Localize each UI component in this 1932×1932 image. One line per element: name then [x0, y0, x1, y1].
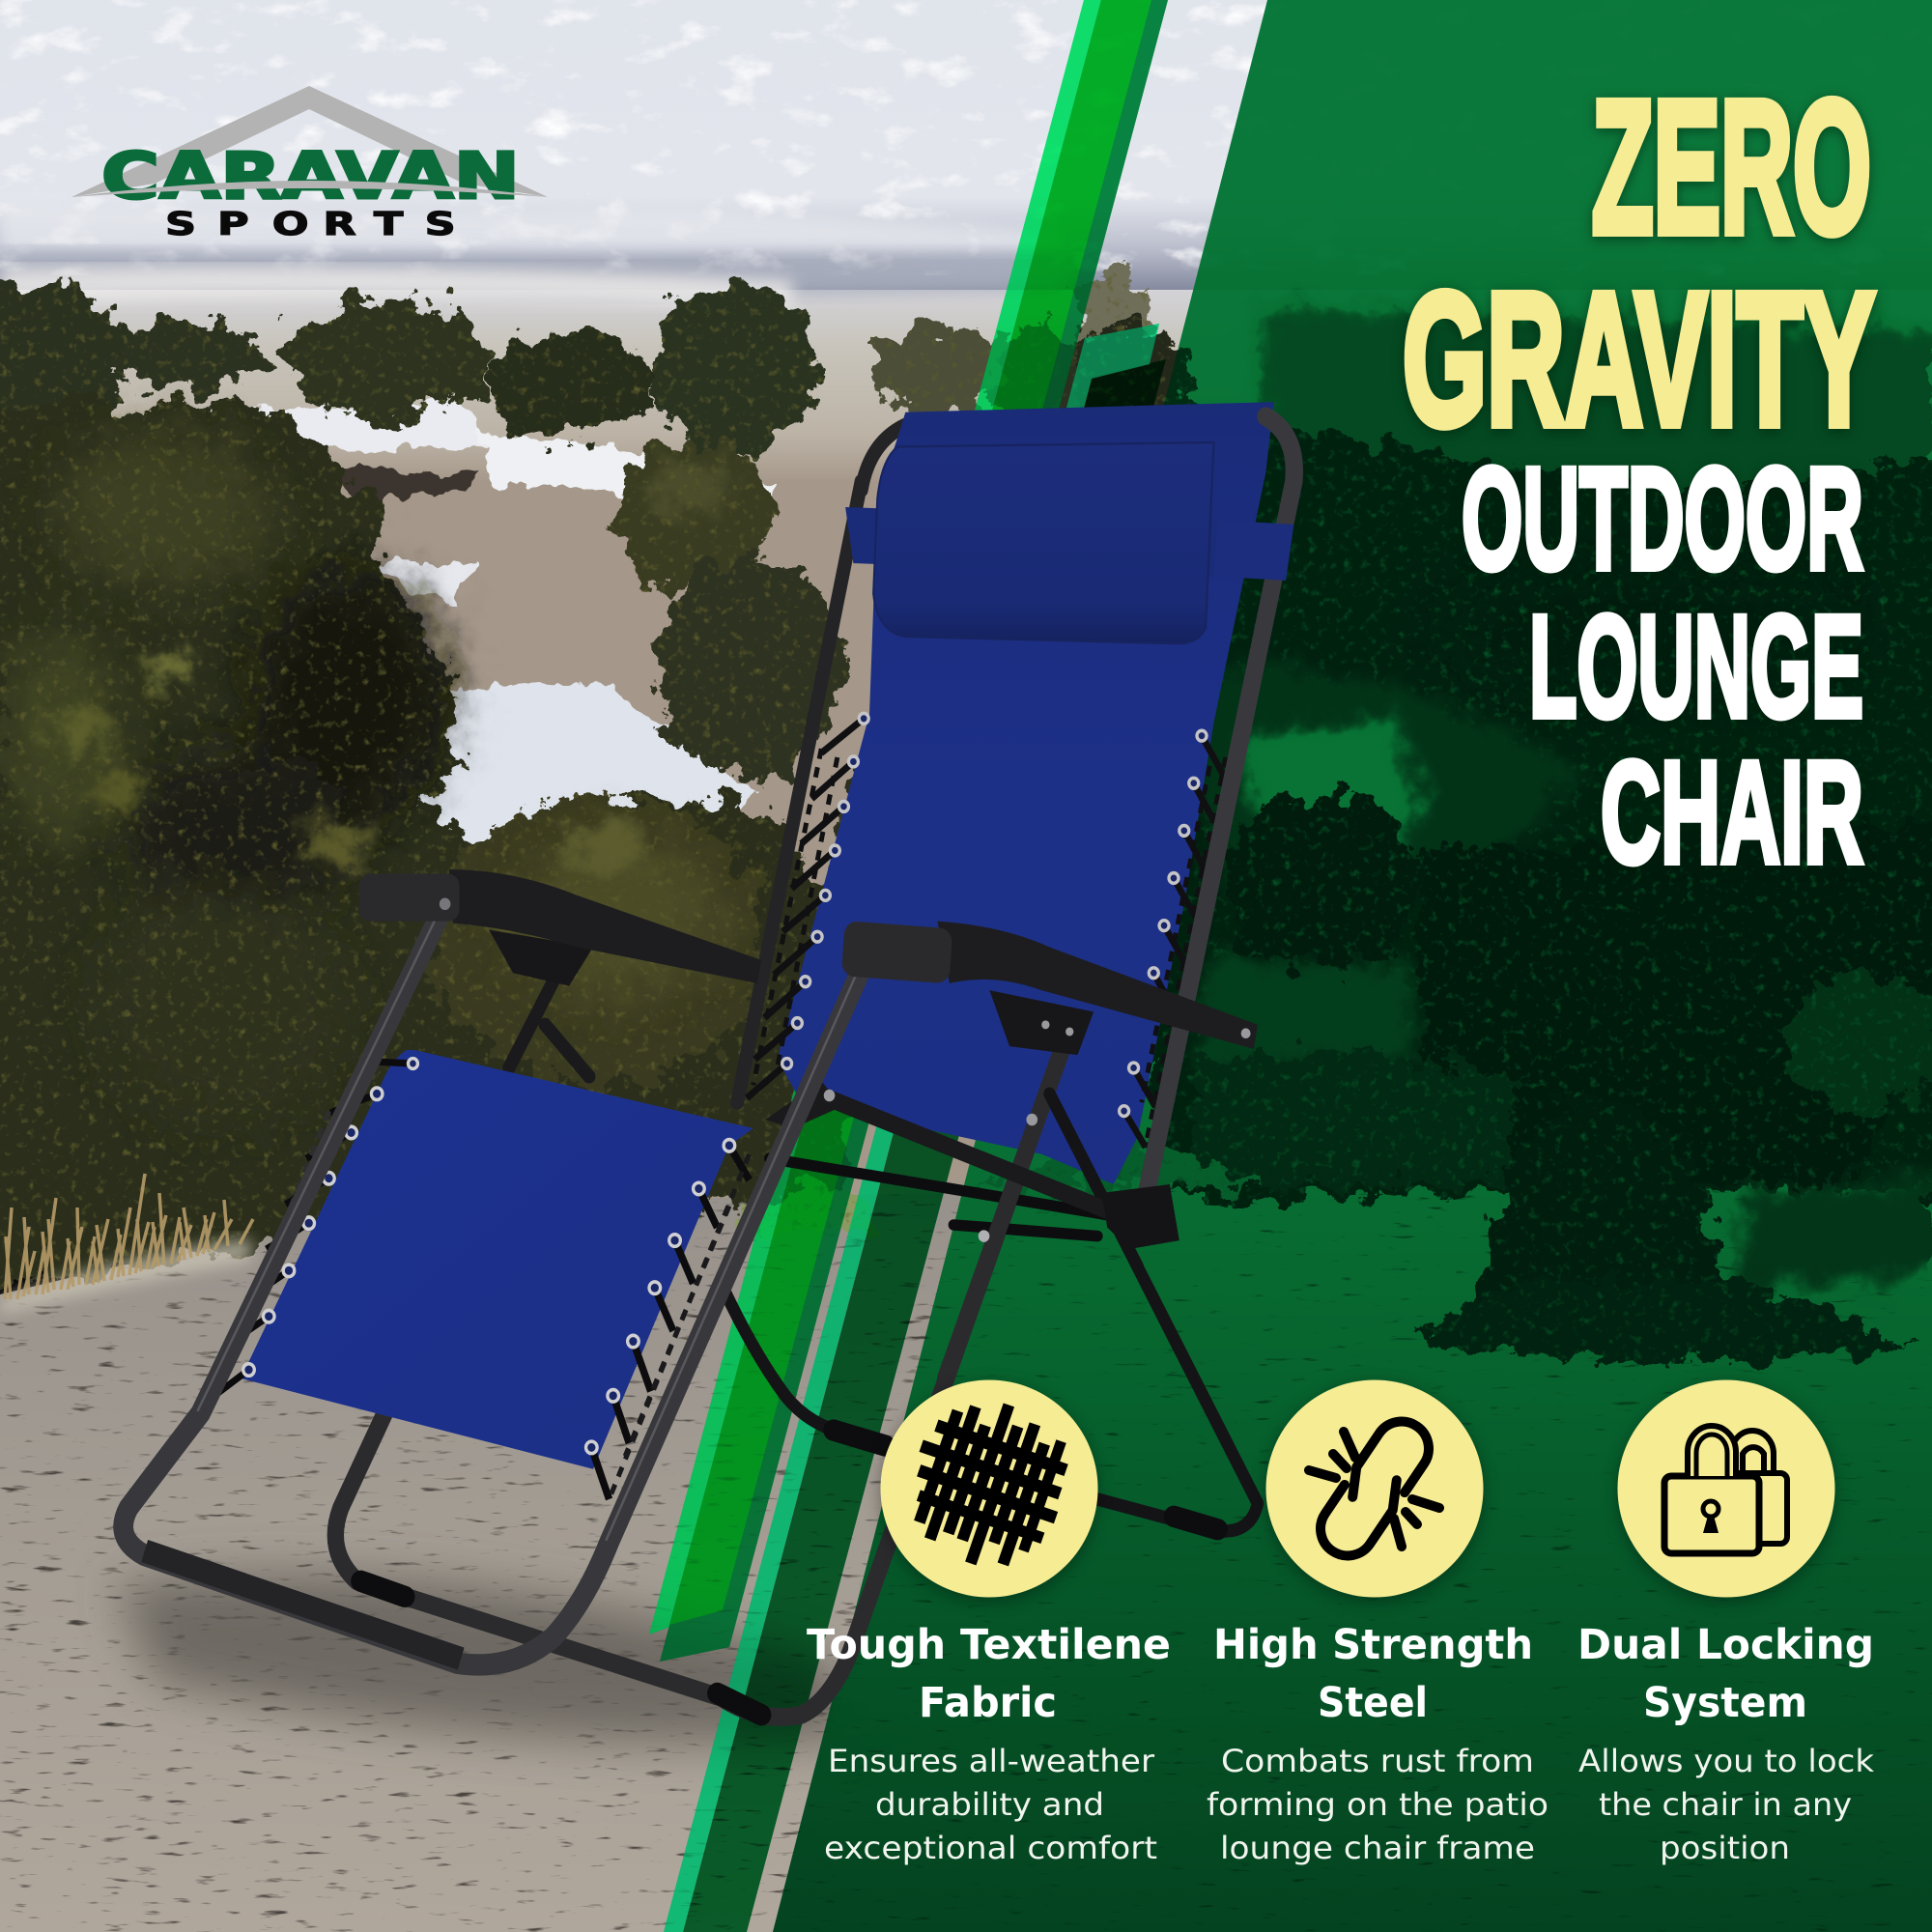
description: Allows you to lock [1578, 1743, 1874, 1779]
logo roof [71, 86, 548, 197]
icon: broken chain link [1265, 1379, 1484, 1598]
title: Zero Gravity Outdoor Lounge Chair [1403, 62, 1875, 893]
diagonal stripes: first green band [649, 0, 1168, 1662]
logo swoosh [71, 181, 548, 197]
feature: dual locking system [1577, 1379, 1874, 1866]
logo wordmark: CARAVAN [101, 139, 520, 213]
feature: high strength steel: forming on the patio [1207, 1786, 1548, 1823]
feature: tough textilene fabric: exceptional comfort [824, 1830, 1157, 1866]
logo: Caravan Sports [71, 86, 548, 242]
description: Combats rust from [1221, 1743, 1534, 1779]
feature: tough textilene fabric: durability and [875, 1786, 1104, 1823]
right back frame tube [1146, 416, 1294, 1197]
feature: tough textilene fabric [807, 1379, 1171, 1866]
icon: two padlocks [1617, 1379, 1835, 1598]
feature: high strength steel: lounge chair frame [1220, 1830, 1535, 1866]
under seat bars and joint [765, 1081, 1179, 1249]
feature: dual locking system: position [1660, 1830, 1790, 1866]
pillow [873, 442, 1213, 643]
feature: tough textilene fabric: Fabric [919, 1679, 1057, 1727]
rear leg frame [335, 425, 1258, 1717]
diagonal stripes: second green band [664, 324, 1166, 1932]
feature: dual locking system: System [1643, 1679, 1807, 1727]
panel: green duotone landscape [773, 0, 1932, 1932]
feature: high strength steel: Steel [1318, 1679, 1428, 1727]
upper leg tubes in front of the back fabric [946, 1051, 1138, 1378]
logo tagline: SPORTS [165, 207, 456, 242]
left armrest [359, 869, 761, 986]
feature: high strength steel [1207, 1379, 1548, 1866]
seat lacing [209, 1059, 750, 1499]
back lacing [747, 713, 1226, 1148]
seat fabric [241, 1050, 753, 1469]
front U frame [124, 913, 866, 1664]
back fabric [778, 402, 1274, 1184]
strap [845, 507, 1293, 581]
feature: dual locking system: the chair in any [1599, 1786, 1852, 1823]
heading: Tough Textilene [807, 1621, 1171, 1669]
product: blue zero gravity chair [124, 402, 1294, 1717]
heading: Dual Locking [1577, 1621, 1874, 1669]
icon: woven fabric [881, 1379, 1097, 1598]
heading: High Strength [1213, 1621, 1533, 1669]
right armrest [824, 921, 1258, 1242]
description: Ensures all-weather [828, 1743, 1155, 1779]
